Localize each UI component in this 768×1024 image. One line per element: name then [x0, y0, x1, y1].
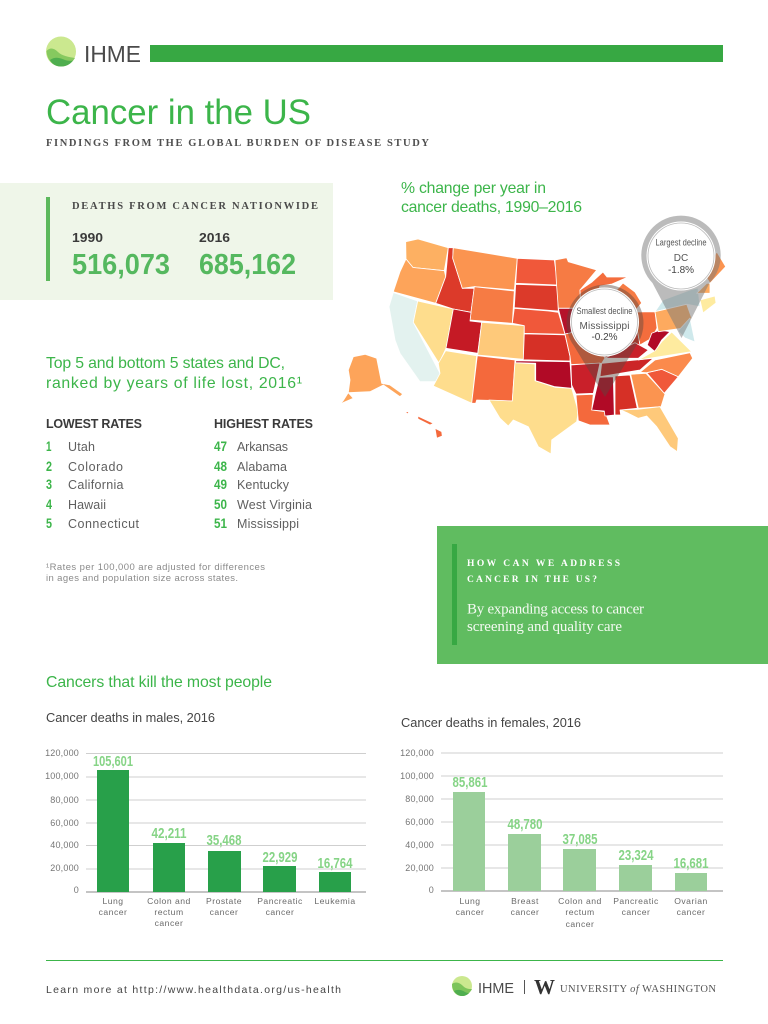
- footer rule: [46, 960, 723, 961]
- question: CANCER IN THE US?: [467, 575, 597, 585]
- bar: lung 105,601: 105,601: [93, 754, 133, 770]
- bar chart: females: 80,000: [405, 794, 434, 804]
- bar: leukemia 16,764: Leukemia: [314, 896, 356, 906]
- bar: prostate 35,468: Prostate: [206, 896, 242, 906]
- bar: leukemia 16,764: 16,764: [318, 856, 352, 872]
- icon: footer IHME logo: [452, 976, 472, 996]
- bar: ovarian 16,681: [674, 856, 708, 917]
- map heading: % change per year in: [401, 180, 546, 197]
- chart title: males: Cancer deaths in males, 2016: [46, 710, 215, 725]
- bar: colon 42,211: 42,211: [152, 826, 186, 842]
- bar: pancreatic 23,324: 23,324: [618, 848, 654, 864]
- list: lowest rates: Hawaii: [68, 498, 106, 512]
- callout: smallest decline Mississippi: -0.2%: [591, 332, 618, 343]
- panel: how can we address: [437, 526, 768, 664]
- list: lowest rates: LOWEST RATES: [46, 417, 142, 431]
- bar: ovarian 16,681: 16,681: [674, 856, 708, 872]
- list: lowest rates: Colorado: [68, 460, 123, 474]
- answer: [467, 602, 644, 635]
- list: highest rates: Mississippi: [237, 517, 299, 531]
- list: lowest rates: California: [68, 478, 124, 492]
- footer logos: UNIVERSITY of WASHINGTON: [560, 984, 716, 995]
- bar: lung 105,601: cancer: [99, 907, 127, 917]
- list: lowest rates: 5: [46, 515, 52, 531]
- bar: pancreatic 22,929: [257, 850, 303, 917]
- bar: lung 85,861: [452, 775, 488, 917]
- bar: colon 37,085: rectum: [565, 907, 595, 917]
- footnote: in ages and population size across states.: [46, 573, 238, 584]
- callout: smallest decline Mississippi: [566, 285, 644, 397]
- callout: largest decline DC: [641, 216, 721, 338]
- footer logos: W: [534, 975, 555, 999]
- bar: colon 42,211: rectum: [154, 907, 184, 917]
- bar: colon 42,211: cancer: [155, 918, 183, 928]
- bar: colon 37,085: 37,085: [562, 832, 598, 848]
- ranking heading line two: ranked by years of life lost, 2016¹: [46, 375, 302, 392]
- list: highest rates: 51: [214, 515, 227, 531]
- footer link text: Learn more at http://www.healthdata.org/us-health: [46, 984, 341, 996]
- bar: lung 85,861: 85,861: [452, 775, 488, 791]
- 2016 deaths: [199, 231, 296, 281]
- choropleth map of US states: [340, 239, 726, 454]
- list: highest rates: Alabama: [237, 460, 287, 474]
- panel heading: DEATHS FROM CANCER NATIONWIDE: [72, 201, 318, 212]
- answer: screening and quality care: [467, 619, 622, 635]
- bar: lung 85,861: cancer: [456, 907, 484, 917]
- bar: pancreatic 22,929: cancer: [266, 907, 294, 917]
- section heading: Cancers that kill the most people: [46, 674, 272, 691]
- Hawaii: [435, 428, 442, 438]
- title: Cancer in the US: [46, 93, 311, 132]
- bar chart: males: 80,000: [50, 795, 79, 805]
- bar: pancreatic 23,324: [613, 848, 659, 917]
- logo wordmark: IHME: [84, 41, 141, 67]
- bar chart: females: 0: [429, 885, 434, 895]
- bar chart: females: [400, 748, 723, 929]
- bar: pancreatic 23,324: Pancreatic: [613, 896, 659, 906]
- answer: By expanding access to cancer: [467, 602, 644, 618]
- bar: prostate 35,468: [206, 833, 242, 917]
- bar: pancreatic 23,324: cancer: [622, 907, 650, 917]
- bar: leukemia 16,764: [314, 856, 356, 906]
- bar: ovarian 16,681: cancer: [677, 907, 705, 917]
- bar: prostate 35,468: cancer: [210, 907, 238, 917]
- bar chart: males: 40,000: [50, 840, 79, 850]
- chart title: females: Cancer deaths in females, 2016: [401, 715, 581, 730]
- bar: lung 85,861: Lung: [459, 896, 481, 906]
- bar: breast 48,780: Breast: [511, 896, 539, 906]
- bar chart: males: 60,000: [50, 818, 79, 828]
- 2016 deaths: 685,162: [199, 249, 296, 281]
- list: lowest rates: [46, 417, 142, 531]
- footer logos: [452, 975, 716, 999]
- bar: colon 37,085: cancer: [566, 919, 594, 929]
- bar: ovarian 16,681: Ovarian: [674, 896, 708, 906]
- callout: largest decline DC: DC: [674, 253, 688, 264]
- bar: breast 48,780: 48,780: [508, 817, 542, 833]
- bar: pancreatic 22,929: Pancreatic: [257, 896, 303, 906]
- subtitle: FINDINGS FROM THE GLOBAL BURDEN OF DISEASE STUDY: [46, 138, 429, 149]
- icon: IHME logo: [46, 36, 76, 66]
- bar: lung 105,601: Lung: [102, 896, 124, 906]
- bar chart: males: [45, 748, 366, 928]
- question: HOW CAN WE ADDRESS: [467, 559, 620, 569]
- footer logos: IHME: [478, 980, 514, 997]
- list: highest rates: Kentucky: [237, 478, 290, 492]
- list: highest rates: 49: [214, 476, 227, 492]
- bar chart: males: 0: [74, 885, 79, 895]
- bar: colon 42,211: Colon and: [147, 896, 191, 906]
- 1990 deaths: 516,073: [72, 249, 170, 281]
- list: highest rates: West Virginia: [237, 498, 312, 512]
- callout: largest decline DC: -1.8%: [668, 265, 694, 276]
- bar chart: females: 100,000: [400, 771, 434, 781]
- 1990 deaths: 1990: [72, 231, 103, 245]
- bar: colon 42,211: [147, 826, 191, 928]
- bar chart: females: 40,000: [405, 840, 434, 850]
- bar chart: females: 60,000: [405, 817, 434, 827]
- list: highest rates: 50: [214, 496, 227, 512]
- bar: lung 105,601: [93, 754, 133, 917]
- footnote: [46, 562, 265, 584]
- map heading line two: cancer deaths, 1990–2016: [401, 199, 582, 216]
- panel: deaths nationwide: [0, 183, 333, 300]
- list: lowest rates: 2: [46, 458, 52, 474]
- callout: largest decline DC: Largest decline: [656, 238, 706, 248]
- header: logo and bar: [46, 36, 723, 67]
- bar: prostate 35,468: 35,468: [206, 833, 242, 849]
- bar: colon 37,085: [558, 832, 602, 929]
- bar: breast 48,780: cancer: [511, 907, 539, 917]
- list: highest rates: [214, 417, 313, 531]
- list: highest rates: 47: [214, 438, 227, 454]
- list: lowest rates: 3: [46, 476, 52, 492]
- bar chart: males: 20,000: [50, 863, 79, 873]
- list: highest rates: Arkansas: [237, 440, 288, 454]
- bar chart: males: 100,000: [45, 771, 79, 781]
- ranking heading: Top 5 and bottom 5 states and DC,: [46, 355, 285, 372]
- bar: breast 48,780: [508, 817, 542, 917]
- list: highest rates: HIGHEST RATES: [214, 417, 313, 431]
- bar: pancreatic 22,929: 22,929: [262, 850, 298, 866]
- list: lowest rates: Utah: [68, 440, 95, 454]
- callout: smallest decline Mississippi: Smallest decline: [576, 306, 632, 316]
- callout: smallest decline Mississippi: Mississippi: [580, 321, 630, 332]
- bar chart: males: 120,000: [45, 748, 79, 758]
- bar chart: females: 120,000: [400, 748, 434, 758]
- footnote: ¹Rates per 100,000 are adjusted for differences: [46, 562, 265, 573]
- list: lowest rates: 4: [46, 496, 52, 512]
- header bar: [150, 45, 723, 62]
- list: lowest rates: 1: [46, 438, 52, 454]
- question: [467, 559, 620, 585]
- bar chart: females: 20,000: [405, 863, 434, 873]
- 2016 deaths: 2016: [199, 231, 230, 245]
- Alaska: [348, 354, 403, 397]
- list: lowest rates: Connecticut: [68, 517, 140, 531]
- bar: colon 37,085: Colon and: [558, 896, 602, 906]
- list: highest rates: 48: [214, 458, 227, 474]
- 1990 deaths: [72, 231, 170, 281]
